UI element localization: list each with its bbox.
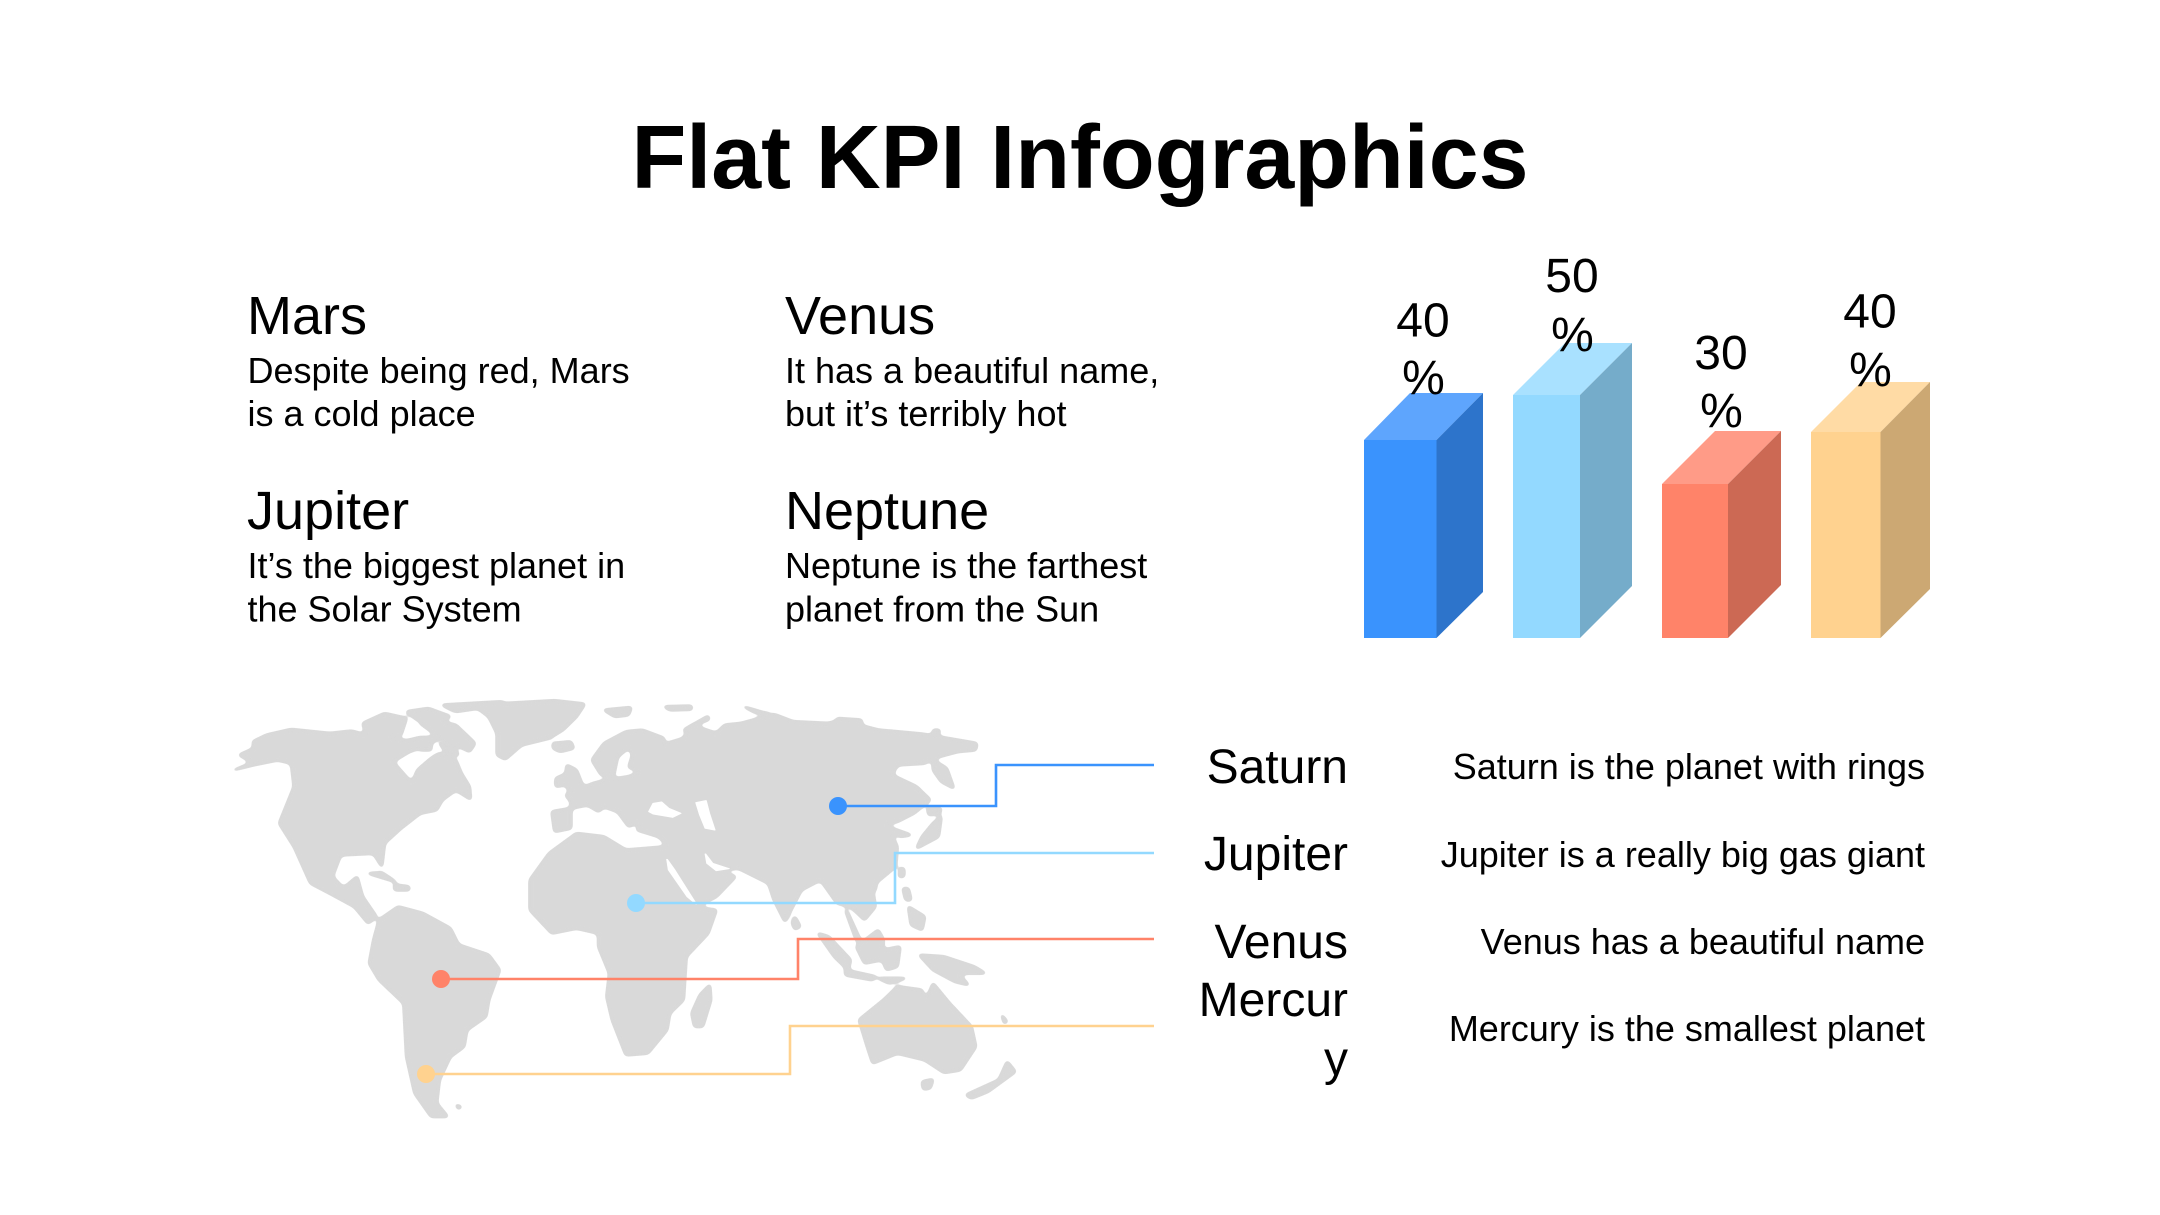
bar: light blue 50%	[1513, 343, 1632, 638]
label: Jupiter: Jupiter	[1204, 828, 1348, 881]
text block: Neptune: Neptune is the farthest	[785, 545, 1147, 586]
text block: Jupiter: Jupiter	[247, 481, 409, 541]
bar: coral 30%	[1662, 431, 1781, 638]
connector: Jupiter	[627, 853, 1154, 912]
text block: Mars: is a cold place	[248, 393, 476, 434]
world map	[234, 701, 1015, 1117]
value label: 40%: 40	[1396, 294, 1450, 348]
value label: 40%	[1843, 286, 1897, 397]
text block: Neptune: Neptune	[785, 481, 989, 541]
text block: Mars	[247, 286, 630, 434]
label: Mercury: Mercur	[1199, 974, 1348, 1027]
text block: Venus	[785, 286, 1159, 434]
connector: Saturn	[829, 765, 1154, 815]
text block: Jupiter: It’s the biggest planet in	[248, 545, 625, 586]
description: Saturn: Saturn is the planet with rings	[1453, 746, 1925, 787]
label: Saturn: Saturn	[1207, 741, 1348, 794]
text block: Venus: It has a beautiful name,	[785, 350, 1159, 391]
connector: Mercury	[417, 1026, 1154, 1083]
label: Mercury	[1199, 974, 1348, 1086]
text block: Neptune: planet from the Sun	[785, 588, 1099, 630]
text block: Jupiter: the Solar System	[248, 588, 522, 630]
value label: 30%	[1694, 327, 1748, 438]
connector: Venus	[432, 939, 1154, 988]
label: Venus: Venus	[1215, 916, 1348, 969]
bar: blue 40%	[1364, 393, 1483, 638]
text block: Venus: Venus	[785, 286, 935, 346]
bar chart	[1364, 250, 1930, 638]
value label: 40%: %	[1849, 344, 1892, 397]
bar: yellow 40%	[1811, 382, 1930, 638]
text block: Venus: but it’s terribly hot	[785, 393, 1066, 434]
value label: 50%	[1545, 250, 1599, 362]
text block: Neptune	[785, 481, 1147, 630]
value label: 50%: %	[1551, 309, 1594, 362]
text block: Jupiter	[247, 481, 625, 630]
value label: 30%: %	[1700, 385, 1743, 438]
text block: Mars: Despite being red, Mars	[248, 350, 630, 391]
value label: 40%: 40	[1843, 286, 1897, 338]
description: Jupiter: Jupiter is a really big gas giant	[1441, 834, 1925, 875]
description: Venus: Venus has a beautiful name	[1481, 921, 1925, 962]
text block: Mars: Mars	[247, 286, 367, 346]
value label: 40%: %	[1402, 352, 1445, 405]
value label: 40%	[1396, 294, 1450, 405]
value label: 30%: 30	[1694, 327, 1748, 380]
value label: 50%: 50	[1545, 250, 1599, 303]
label: Mercury: y	[1324, 1033, 1348, 1086]
description: Mercury: Mercury is the smallest planet	[1449, 1008, 1925, 1049]
title: Flat KPI Infographics	[632, 108, 1528, 208]
